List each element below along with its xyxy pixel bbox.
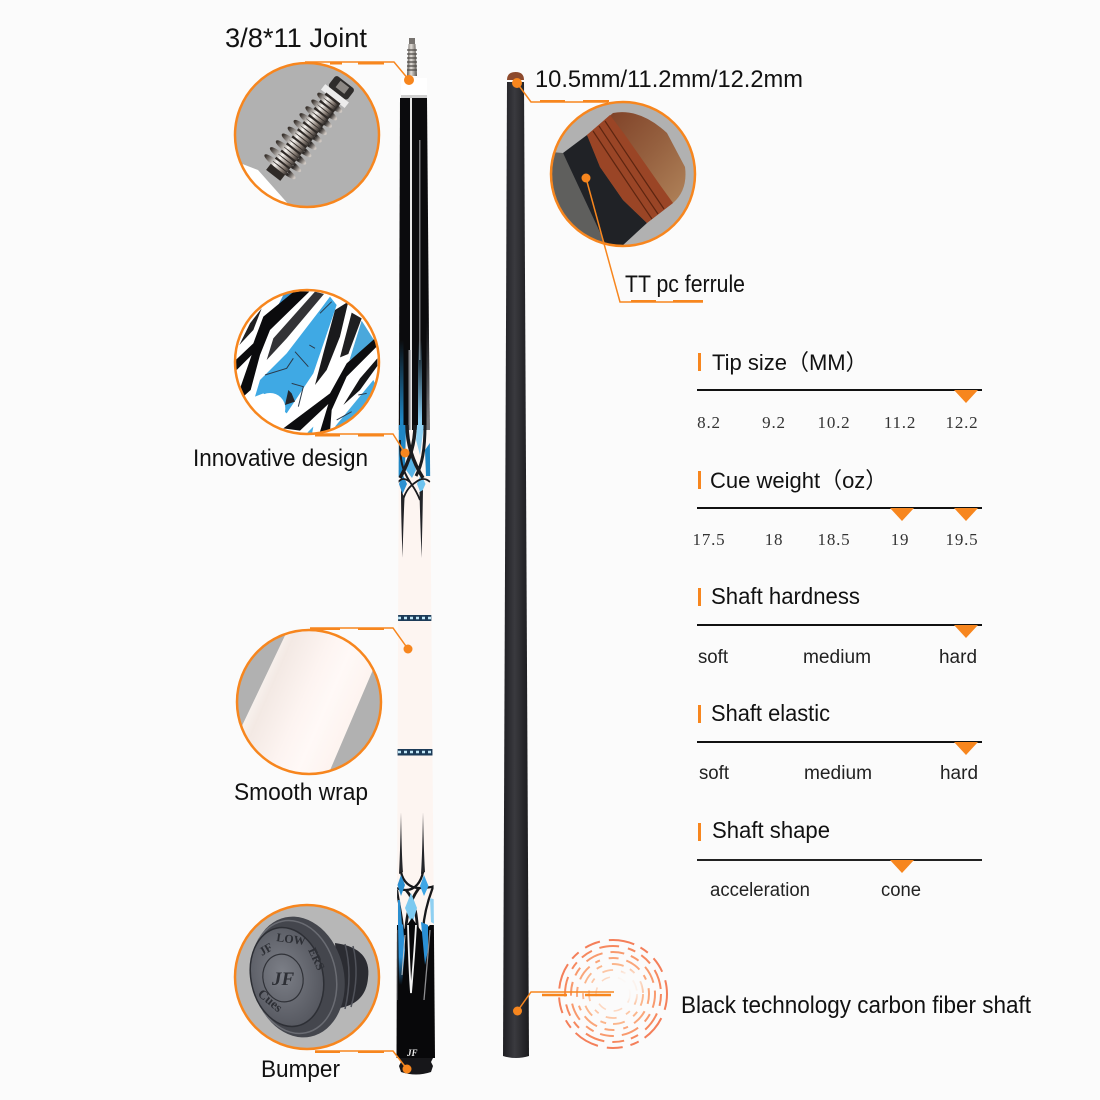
spec: shaft elastic: hard: [940, 763, 978, 784]
leather tip: [587, 112, 686, 223]
spec: shaft shape: [697, 817, 982, 901]
spec: shaft hardness: medium: [803, 647, 871, 668]
leader: tip: [512, 78, 609, 102]
bumper detail: [235, 905, 379, 1049]
joint detail: [232, 63, 379, 215]
spec: cue weight: 18: [765, 530, 783, 549]
spec: tip size: Tip size（MM）: [712, 350, 868, 375]
lower black forearm: [396, 918, 435, 1058]
shaft: [503, 72, 529, 1058]
shaft end: [552, 152, 605, 242]
spec: tip size: 10.2: [818, 413, 850, 432]
bumper detail: Cues: [255, 986, 286, 1015]
spec: shaft elastic: medium: [804, 763, 872, 784]
shaft tip: [507, 72, 524, 80]
cue body: [396, 98, 435, 1058]
black stripes: [234, 291, 309, 396]
bumper neck: [335, 943, 368, 1008]
label: smooth wrap: Smooth wrap: [234, 779, 368, 806]
lower blue panels: [398, 920, 428, 985]
spec: tip size: 12.2: [946, 413, 978, 432]
carbon fiber icon: [559, 940, 667, 1048]
brand mark: JF: [406, 1048, 418, 1058]
spec: cue weight: 18.5: [818, 530, 850, 549]
spec: tip size: [697, 350, 982, 432]
upper stripes: [400, 98, 430, 430]
screw: [264, 76, 354, 181]
marble veins: [285, 390, 295, 405]
leader: smooth wrap: [310, 628, 412, 654]
leader: ferrule: [582, 174, 703, 302]
white joint ring: [401, 78, 427, 98]
label: ferrule: TT pc ferrule: [625, 271, 745, 298]
innovative design detail: [234, 290, 380, 434]
bumper detail: ERS: [305, 945, 328, 973]
decorative bands: [398, 615, 432, 756]
joint pin: [407, 38, 417, 76]
spec: shaft hardness: hard: [939, 647, 977, 668]
label: tip sizes: 10.5mm/11.2mm/12.2mm: [535, 66, 803, 93]
spec: shaft hardness: [697, 583, 982, 668]
upper black forearm: [398, 98, 430, 430]
upper diamonds: [399, 474, 426, 494]
leader: joint: [305, 62, 414, 85]
spec: shaft elastic: soft: [699, 763, 730, 784]
lower arcs: [397, 872, 434, 930]
label: innovative design: Innovative design: [193, 445, 368, 472]
spec: cue weight: [693, 468, 982, 549]
leader: innovative design: [315, 434, 410, 458]
spec: tip size: 11.2: [884, 413, 916, 432]
spec: cue weight: 17.5: [693, 530, 725, 549]
upper spikes: [401, 490, 423, 558]
label: carbon fiber shaft: Black technology carbon fiber shaft: [681, 992, 1031, 1019]
black ferrule: [563, 135, 647, 246]
white reflection: [264, 393, 286, 412]
butt cue: [396, 38, 435, 1074]
leader: carbon fiber: [513, 992, 614, 1016]
spec: tip size: 8.2: [697, 413, 721, 432]
spec: shaft hardness: Shaft hardness: [711, 583, 860, 609]
spec: shaft shape: cone: [881, 880, 921, 901]
upper blue inlays: [398, 425, 432, 478]
spec: cue weight: Cue weight（oz）: [710, 468, 887, 493]
lower spikes: [399, 812, 425, 874]
bumper detail: JF: [271, 969, 294, 990]
spec: cue weight: 19.5: [946, 530, 978, 549]
label: bumper: Bumper: [261, 1056, 340, 1083]
lower diamonds: [398, 875, 436, 925]
bumper end: [399, 1058, 433, 1074]
smooth wrap detail: [237, 625, 395, 775]
bumper lettering: JF: [256, 940, 275, 959]
blue areas: [255, 297, 337, 413]
spec: shaft shape: Shaft shape: [712, 817, 830, 843]
spec: shaft shape: acceleration: [710, 880, 810, 901]
leader: bumper: [315, 1051, 412, 1074]
label: joint: 3/8*11 Joint: [225, 23, 367, 53]
lower white lines: [397, 925, 430, 1000]
spec: cue weight: 19: [891, 530, 909, 549]
spec: shaft elastic: Shaft elastic: [711, 700, 830, 726]
bumper head: [260, 916, 345, 1038]
spec: tip size: 9.2: [762, 413, 786, 432]
upper arcs: [398, 425, 430, 500]
spec: shaft hardness: soft: [698, 647, 729, 668]
ferrule detail: [545, 102, 695, 246]
spec: shaft elastic: [697, 700, 982, 784]
bumper detail: LOW: [276, 930, 307, 948]
